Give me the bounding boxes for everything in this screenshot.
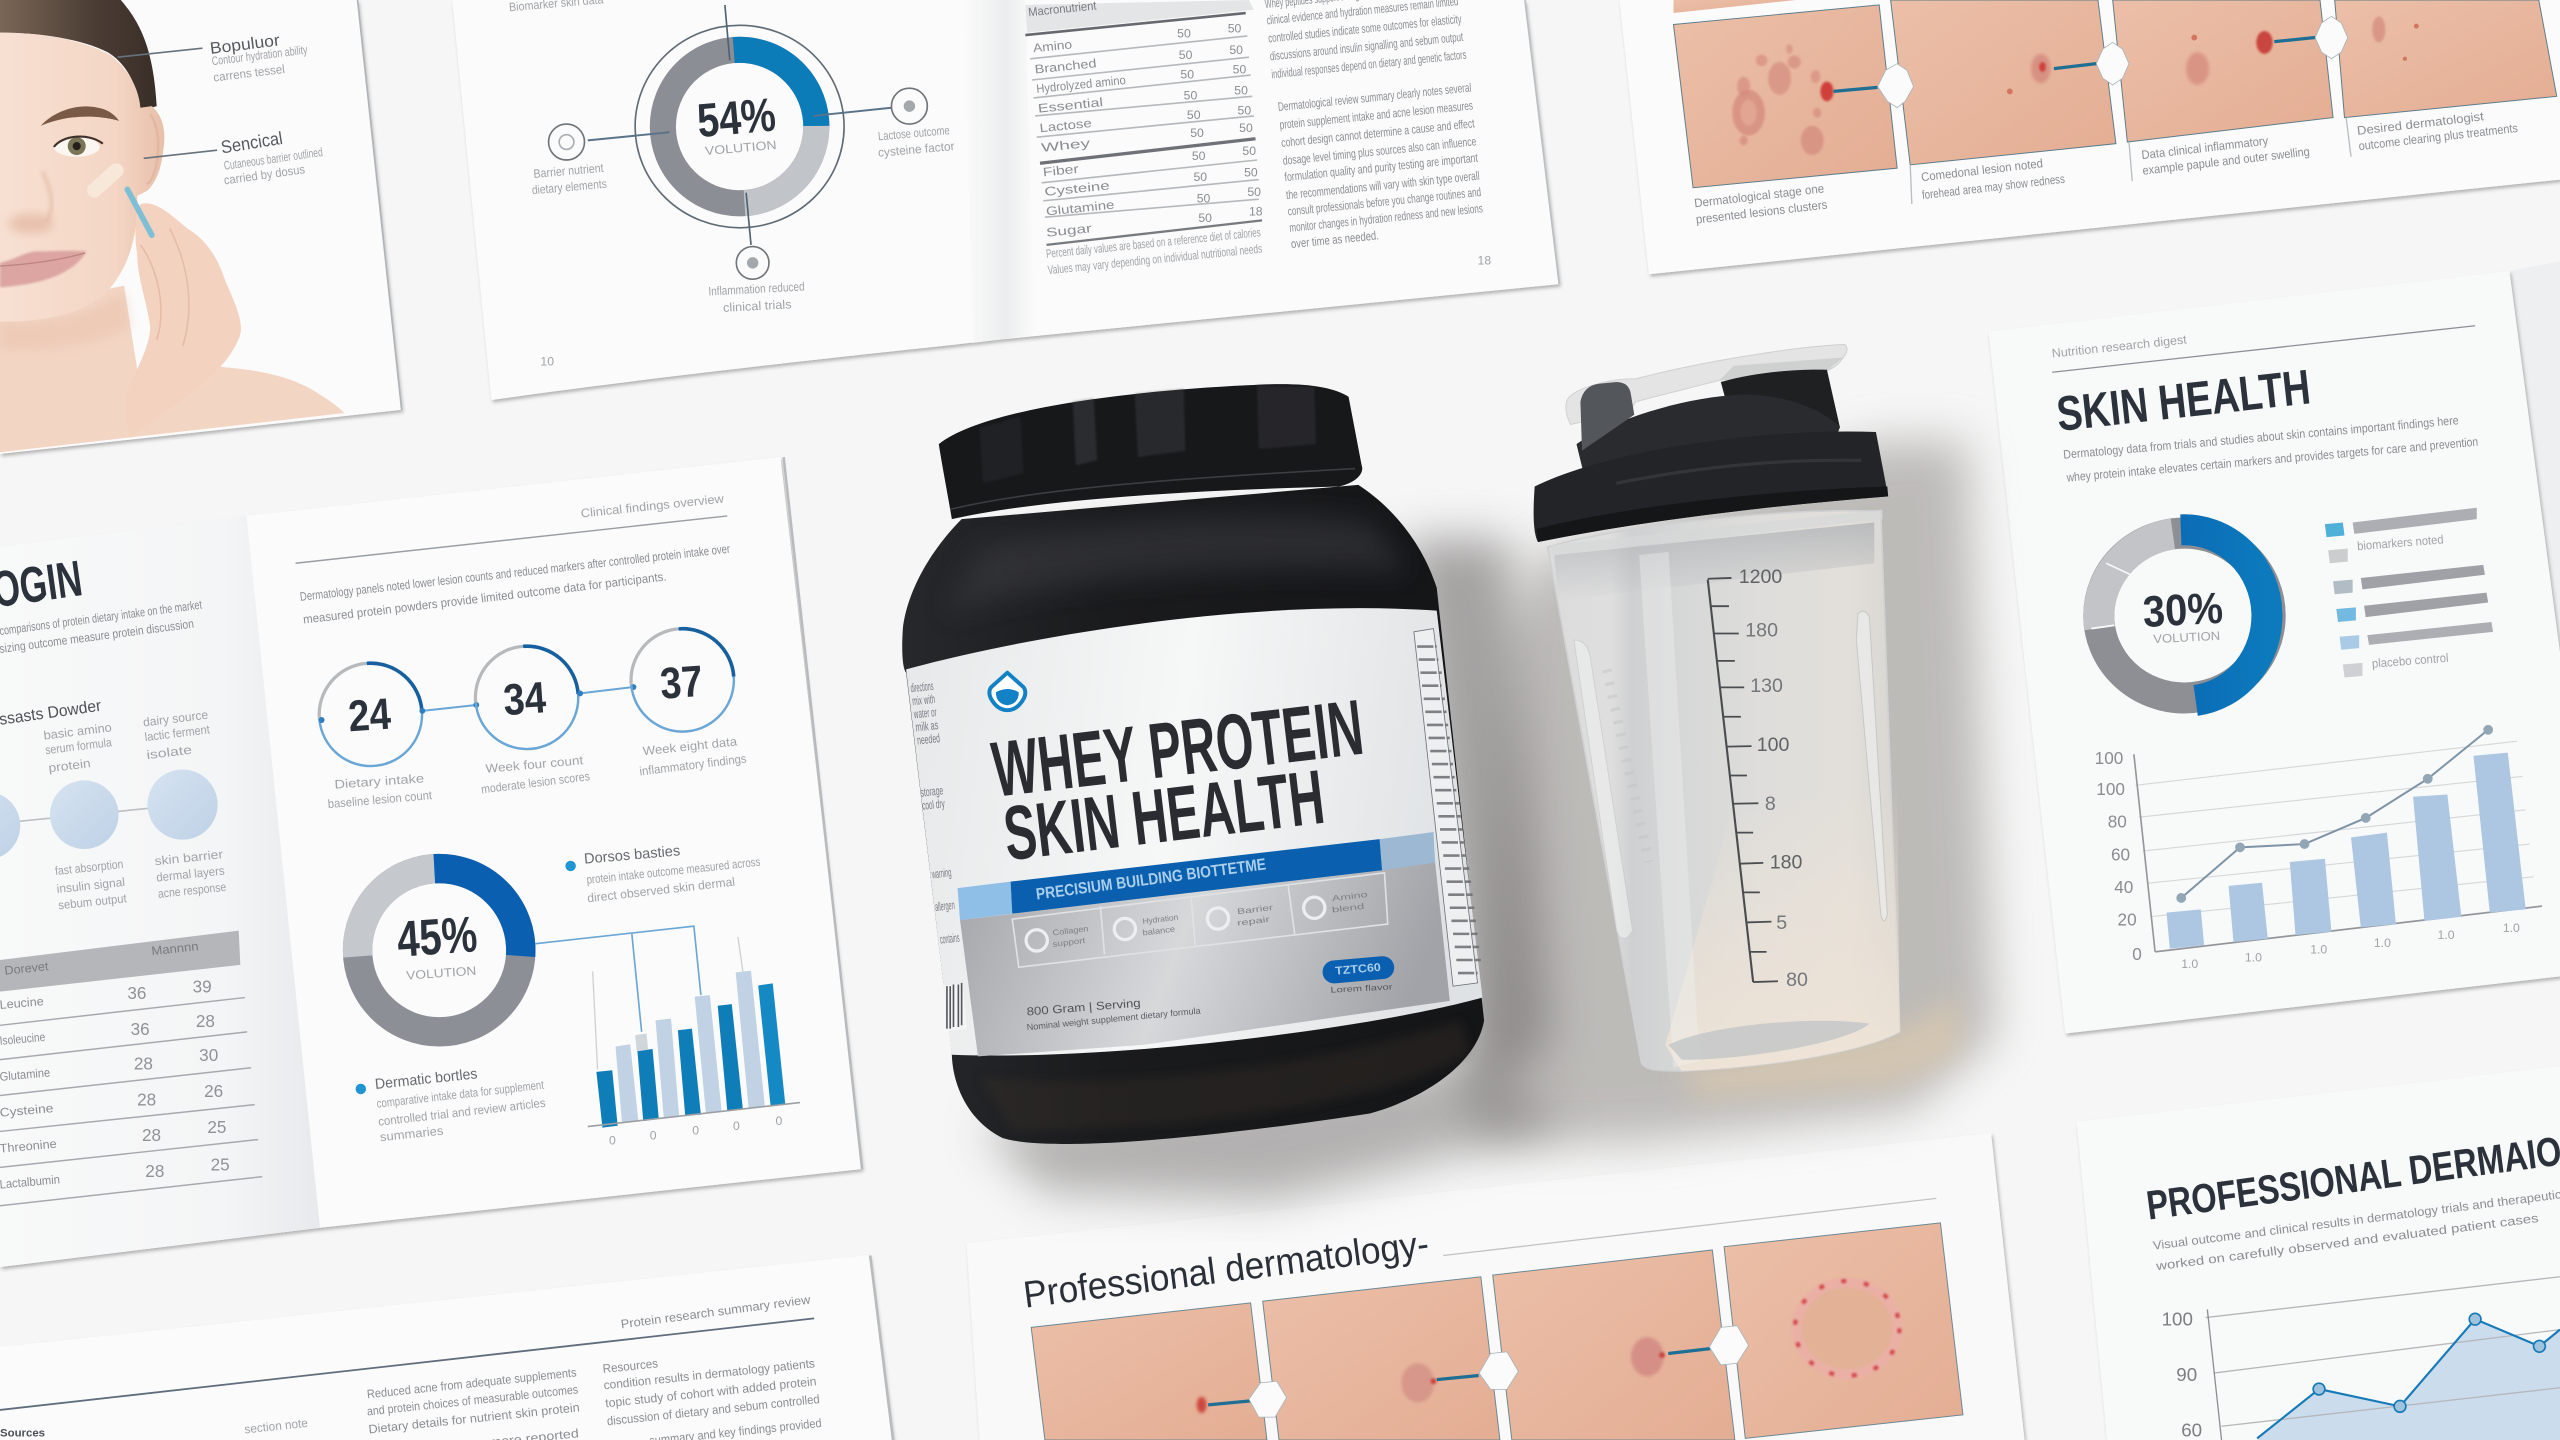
shaker: measurement scale: 180 xyxy=(1745,620,1778,642)
captions: Desired dermatologist xyxy=(2356,109,2485,138)
panel: bottom-right dermatology page xyxy=(2077,1066,2560,1440)
legend: bottom: controlled trial and review articles xyxy=(378,1096,546,1129)
label: side text left: directions xyxy=(910,679,934,695)
left page: table: 28 xyxy=(134,1053,153,1073)
chart: bars and trend line: 1.0 xyxy=(2245,951,2262,965)
label: feature icon grid xyxy=(1012,873,1388,967)
chart: paired bars: 0 xyxy=(650,1129,657,1143)
callout: Sencical: Sencical xyxy=(220,128,284,157)
label: side text left: storage xyxy=(920,783,944,800)
label: blue badge: Lorem flavor xyxy=(1330,982,1393,995)
shaker: cup xyxy=(1548,509,1900,1071)
right page: header: Dermatology panels noted lower lesion counts and reduced markers after controlled protein intake over xyxy=(299,542,731,604)
captions: Dermatological stage one xyxy=(1693,181,1825,210)
table: nutrition data: 50 xyxy=(1242,144,1256,158)
table: nutrition data: Sugar xyxy=(1045,221,1092,240)
table: nutrition data: 50 xyxy=(1229,43,1243,57)
table: nutrition data: Essential xyxy=(1037,95,1104,116)
left page: table: Cysteine xyxy=(0,1101,54,1120)
label: barcode xyxy=(943,983,967,1031)
chart: bars and trend line: 1.0 xyxy=(2503,921,2520,935)
label: blue ribbon xyxy=(1011,839,1382,914)
text block: lower columns: and protein choices of measurable outcomes xyxy=(366,1382,579,1418)
table: nutrition data: Fiber xyxy=(1042,162,1079,179)
chart: 30% donut: 30% xyxy=(2142,584,2224,637)
chart: bars and trend line xyxy=(2095,725,2542,971)
text block: lower columns: section note xyxy=(244,1416,309,1436)
table: nutrition data: Branched xyxy=(1034,56,1097,76)
panel: top-right dermatology strip xyxy=(1620,0,2560,274)
legend: bottom: summaries xyxy=(379,1124,444,1144)
metric circle: 37: 37 xyxy=(659,657,704,709)
table: nutrition data: Hydrolyzed amino xyxy=(1036,73,1127,96)
left page: table: 26 xyxy=(204,1081,223,1101)
chart: paired bars: 0 xyxy=(692,1124,699,1138)
label: feature icon grid: blend xyxy=(1331,902,1366,915)
shaker: measurement scale: 130 xyxy=(1750,675,1783,697)
chart: 54% donut: VOLUTION xyxy=(704,138,777,158)
table: nutrition data: 50 xyxy=(1197,191,1211,205)
legend: bottom: comparative intake data for supplement xyxy=(376,1078,545,1111)
chart: paired bars: 0 xyxy=(609,1133,616,1147)
label: side text left: mix with xyxy=(912,692,936,708)
text block: article columns: cohort design cannot determine a cause and effect xyxy=(1281,116,1476,150)
heading: Professional dermatology: Professional dermatology- xyxy=(1021,1222,1431,1316)
icon: right node xyxy=(813,88,955,160)
left page: table: Dorevet xyxy=(4,959,50,978)
text block: article columns: controlled studies indicate some outcomes for elasticity xyxy=(1267,12,1463,45)
legend: bottom: Dermatic bortles xyxy=(374,1066,478,1093)
metric circle: 24: baseline lesion count xyxy=(327,788,433,811)
text block: article columns: Dermatological review summary clearly notes several xyxy=(1277,80,1472,114)
chart: area line: 100 xyxy=(2162,1309,2193,1330)
icon: right node: cysteine factor xyxy=(877,139,955,160)
table: nutrition data: Lactose xyxy=(1039,116,1093,135)
captions: presented lesions clusters xyxy=(1695,198,1828,227)
table: nutrition data: 50 xyxy=(1198,211,1212,225)
icon: left node: dietary elements xyxy=(531,177,607,197)
shaker: measurement scale: 80 xyxy=(1786,969,1808,991)
text block: article columns: individual responses depend on dietary and genetic factors xyxy=(1271,48,1467,81)
label: side text left: water or xyxy=(913,705,937,721)
table: nutrition data: 50 xyxy=(1239,121,1253,135)
table: nutrition data: 50 xyxy=(1180,67,1194,81)
left page: table: 39 xyxy=(193,977,212,997)
metric circle: 24 xyxy=(315,659,433,811)
chart: bars and trend line: 0 xyxy=(2132,944,2142,964)
chart: 30% donut: VOLUTION xyxy=(2153,629,2220,646)
left page: flow circles: fast absorption xyxy=(54,857,124,878)
legend: top: Dorsos basties xyxy=(583,843,681,868)
chart: paired bars: 0 xyxy=(776,1114,783,1128)
left page: table: Lactalbumin xyxy=(0,1172,61,1192)
label: light blue ribbon right xyxy=(1380,832,1435,870)
captions: example papule and outer swelling xyxy=(2142,144,2311,178)
left page: table: 28 xyxy=(145,1161,164,1181)
metric circle: 37 xyxy=(627,624,747,778)
text block: article columns: 18 xyxy=(1478,253,1491,267)
callout: Sencical xyxy=(144,128,324,187)
right page: header xyxy=(296,492,731,627)
page number left: 10 xyxy=(540,355,554,369)
label: blue badge: TZTC60 xyxy=(1335,962,1381,978)
callout: Bopuluor xyxy=(118,31,309,85)
left page: flow circles: skin barrier xyxy=(154,847,224,868)
label: nutrition facts strip xyxy=(1414,629,1481,986)
text block: article columns: dosage level timing plus sources also can influence xyxy=(1282,134,1477,168)
panel: left booklet spread xyxy=(0,457,862,1267)
left page: table xyxy=(0,931,262,1206)
skin panel 3 xyxy=(1493,1250,1735,1440)
callout: Sencical: carried by dosus xyxy=(223,162,306,187)
label: side text left xyxy=(910,679,960,947)
left page: flow circles: protein xyxy=(48,756,92,775)
legend: bottom xyxy=(356,1066,546,1144)
icon: bottom node: Inflammation reduced xyxy=(708,279,805,299)
table: nutrition data: Percent daily values are based on a reference diet of calories xyxy=(1045,225,1261,261)
jar: body xyxy=(902,485,1484,1144)
legend: placebo control xyxy=(2371,651,2449,671)
icon: water drop logo xyxy=(989,673,1025,710)
shaker: spout xyxy=(1721,370,1840,428)
chart: area line: 90 xyxy=(2176,1364,2197,1385)
chart: paired bars xyxy=(536,926,800,1147)
table: nutrition data: 50 xyxy=(1247,185,1261,199)
chart: bars and trend line: 100 xyxy=(2095,748,2123,768)
label: feature icon grid: balance xyxy=(1142,925,1176,937)
table: nutrition data: 50 xyxy=(1193,170,1207,184)
text block: lower columns: condition results in dermatology patients xyxy=(603,1356,815,1392)
captions xyxy=(1693,109,2518,227)
left page: table: Threonine xyxy=(0,1137,57,1156)
captions: Data clinical inflammatory xyxy=(2141,134,2270,162)
left page: table: 28 xyxy=(196,1011,215,1031)
icon: right node: Lactose outcome xyxy=(877,123,950,143)
label: side text left: needed xyxy=(916,731,941,747)
label: silver panel xyxy=(960,862,1450,1056)
label: feature icon grid: Hydration xyxy=(1142,913,1179,926)
panel: top-left face page xyxy=(0,0,402,454)
table: nutrition data: 50 xyxy=(1184,89,1197,103)
left page: table: Isoleucine xyxy=(0,1030,46,1048)
text block: lower columns xyxy=(0,1356,822,1440)
connector 34 to 37 xyxy=(577,684,636,696)
skin panel 1 xyxy=(1031,1303,1267,1440)
callout: Bopuluor: carrens tessel xyxy=(213,62,286,85)
text block: intro xyxy=(2152,1187,2560,1273)
left page: flow circles: basic amino xyxy=(43,720,113,743)
icon: bottom node xyxy=(708,247,805,315)
chart: bars and trend line: 100 xyxy=(2096,779,2125,799)
label: net weight text: Nominal weight supplement dietary formula xyxy=(1026,1005,1201,1032)
product: shaker bottle xyxy=(1534,344,1900,1071)
left page: table: Mannnn xyxy=(151,939,199,958)
text block: lower columns: Dietary details for nutrient skin protein xyxy=(368,1400,581,1436)
chart: area line xyxy=(2162,1277,2560,1440)
skin panel 2 xyxy=(1263,1277,1500,1440)
text block: intro: worked on carefully observed and evaluated patient cases xyxy=(2154,1211,2539,1273)
text block: article columns: discussions around insulin signalling and sebum output xyxy=(1269,30,1464,63)
table: nutrition data: 50 xyxy=(1234,84,1248,98)
text block: lower columns: discussion of dietary and sebum controlled xyxy=(606,1392,821,1428)
metric circle: 34: moderate lesion scores xyxy=(480,769,591,796)
label: feature icon grid: Barrier xyxy=(1237,903,1274,916)
left page: flow circles: acne response xyxy=(157,880,227,901)
connector: markers and diamonds xyxy=(1208,1326,1749,1417)
panel: bottom-left page xyxy=(0,1255,893,1440)
skin panel 3 xyxy=(2113,0,2333,142)
legend: biomarkers noted xyxy=(2357,532,2444,553)
label: product title line 2: SKIN HEALTH xyxy=(999,755,1329,877)
icon: bottom node: clinical trials xyxy=(723,297,792,315)
chart: bars and trend line: 1.0 xyxy=(2310,942,2327,956)
shaker: measurement scale: 8 xyxy=(1765,793,1776,815)
left page: table: Leucine xyxy=(0,994,44,1012)
table: nutrition data: Glutamine xyxy=(1045,198,1115,218)
label: net weight text: 800 Gram | Serving xyxy=(1026,998,1141,1019)
label: side text left: milk as xyxy=(915,718,939,734)
metric circle: 37: Week eight data xyxy=(642,734,738,758)
panel: Skin Health page xyxy=(1989,261,2560,1033)
table: nutrition data: 50 xyxy=(1233,62,1246,76)
panel: bottom-middle dermatology page xyxy=(967,1133,2024,1440)
table: nutrition data: Cysteine xyxy=(1044,178,1110,199)
text block: article columns: formulation quality and purity testing are important xyxy=(1284,151,1479,184)
label: feature icon grid: repair xyxy=(1237,915,1271,928)
text block: article columns: the recommendations will vary with skin type overall xyxy=(1285,169,1480,202)
chart: paired bars: 0 xyxy=(733,1119,740,1133)
jar: cap xyxy=(939,384,1362,519)
left page: flow circles xyxy=(0,697,227,912)
left page: flow circles: lactic ferment xyxy=(144,722,211,744)
left page: flow circles: dermal layers xyxy=(156,864,225,885)
table: nutrition data: 50 xyxy=(1228,22,1242,36)
metric circle: 24: Dietary intake xyxy=(334,771,425,792)
photo: woman applying skincare xyxy=(0,0,344,452)
table: nutrition data: Whey xyxy=(1041,136,1092,155)
left page: table: 28 xyxy=(137,1089,156,1109)
table: nutrition data: 50 xyxy=(1179,48,1193,62)
text block: article columns: consult professionals before you change routines and xyxy=(1287,185,1482,218)
left page: intro text: sizing outcome measure protein discussion xyxy=(0,617,195,656)
text block: intro xyxy=(2063,413,2479,485)
text block: lower columns: topic study of cohort with added protein xyxy=(605,1374,817,1410)
skin panel 1 xyxy=(1673,5,1897,188)
chart: bars and trend line: 60 xyxy=(2111,844,2130,864)
table: nutrition data: 50 xyxy=(1190,126,1204,140)
legend xyxy=(2325,508,2493,678)
label: feature icon grid: Amino xyxy=(1331,890,1369,903)
chart: bars and trend line: 20 xyxy=(2118,910,2137,930)
skin panel 4 xyxy=(2335,0,2557,118)
icon: left node xyxy=(531,124,669,197)
label: product title line 1: WHEY PROTEIN xyxy=(988,683,1368,814)
chart: bars and trend line: 80 xyxy=(2108,812,2127,832)
label: side text left: allergen xyxy=(934,898,955,914)
callout: Sencical: Cutaneous barrier outlined xyxy=(223,145,324,173)
panel: Skin Health page: Nutrition research digest xyxy=(2051,332,2188,361)
captions: forehead area may show redness xyxy=(1921,172,2066,202)
left page: flow circles: serum formula xyxy=(44,735,113,757)
captions: outcome clearing plus treatments xyxy=(2358,121,2518,153)
shaker: flip cap xyxy=(1566,344,1847,424)
label: feature icon grid: support xyxy=(1052,936,1087,949)
jar: label xyxy=(906,608,1482,1056)
chart: 45% donut: 45% xyxy=(395,905,479,968)
legend: top xyxy=(565,843,761,905)
left page: table: 30 xyxy=(199,1045,218,1065)
right page: header: Clinical findings overview xyxy=(580,492,725,521)
table: nutrition data: 50 xyxy=(1192,149,1206,163)
table: nutrition data: Values may vary depending on individual nutritional needs xyxy=(1047,242,1263,277)
chart: 54% donut xyxy=(635,5,844,245)
left page: table: 28 xyxy=(142,1125,161,1145)
chart: 45% donut: VOLUTION xyxy=(406,964,477,983)
metric circle: 34: Week four count xyxy=(485,753,584,776)
table: nutrition data: 50 xyxy=(1238,103,1251,117)
metric circle: 37: inflammatory findings xyxy=(639,751,747,778)
left page: flow circles: ssasts Dowder xyxy=(0,697,103,729)
skin panel 2 xyxy=(1891,0,2116,165)
text block: intro: Dermatology data from trials and studies about skin contains important findings here xyxy=(2063,413,2459,462)
chart: bars and trend line: 1.0 xyxy=(2438,928,2455,942)
panel: bottom-left page: Protein research summary review xyxy=(620,1292,811,1331)
left page: table: 25 xyxy=(211,1155,230,1175)
label: light blue ribbon left xyxy=(958,882,1012,920)
text block: article columns: protein supplement intake and acne lesion measures xyxy=(1279,98,1474,132)
left page: table: 36 xyxy=(127,983,146,1003)
chart: 54% donut: 54% xyxy=(695,88,778,148)
captions: Comedonal lesion noted xyxy=(1920,156,2044,184)
left page: table: 36 xyxy=(131,1019,150,1039)
metric circle: 24: 24 xyxy=(347,690,393,741)
table: nutrition data: Amino xyxy=(1032,37,1073,55)
left page: flow circles: isolate xyxy=(146,743,193,762)
shaker: measurement scale xyxy=(1708,566,1808,991)
text block: lower columns: Reduced acne from adequate supplements xyxy=(366,1365,577,1401)
left page: flow circles: dairy source xyxy=(142,708,209,730)
jar: bottom reflection xyxy=(980,1020,1469,1130)
left page: flow circles: sebum output xyxy=(58,891,128,912)
heading: SKIN HEALTH: SKIN HEALTH xyxy=(2054,360,2313,442)
table: nutrition data xyxy=(1025,0,1263,277)
left page: table: Glutamine xyxy=(0,1065,51,1084)
jar: label: contains xyxy=(939,931,960,947)
chart: bars and trend line: 1.0 xyxy=(2374,936,2391,950)
left page: table: 25 xyxy=(207,1117,226,1137)
connector 24 to 34 xyxy=(419,702,479,714)
skin panel 4 xyxy=(1724,1223,1963,1438)
legend: top: direct observed skin dermal xyxy=(587,875,736,905)
shaker: measurement scale: 100 xyxy=(1757,734,1790,756)
right page: header: measured protein powders provide limited outcome data for participants. xyxy=(302,569,667,627)
text block: article columns: over time as needed. xyxy=(1290,228,1379,251)
shaker: measurement scale: 5 xyxy=(1776,912,1787,934)
shaker: measurement scale: 1200 xyxy=(1739,566,1782,588)
text block: lower columns: Resources xyxy=(602,1356,659,1376)
text block: intro: Visual outcome and clinical results in dermatology trials and therapeutic xyxy=(2152,1187,2560,1253)
label: blue badge xyxy=(1322,955,1395,995)
callout: Bopuluor: Contour hydration ability xyxy=(211,43,309,68)
table: nutrition data: 50 xyxy=(1244,165,1258,179)
shaker: measurement scale: 180 xyxy=(1770,852,1803,874)
shadow: products cast shadow xyxy=(980,441,1995,1200)
shaker: lid xyxy=(1534,382,1888,542)
chart: bars and trend line: 40 xyxy=(2114,877,2133,897)
metric circle: 34: 34 xyxy=(502,673,548,725)
icon: left node: Barrier nutrient xyxy=(533,161,605,181)
jar: shoulder sheen xyxy=(947,515,1407,612)
left page: intro text: comparisons of protein dietary intake on the market xyxy=(0,598,203,638)
label: side text left: cool dry xyxy=(921,796,946,813)
label: feature icon grid: Collagen xyxy=(1052,924,1089,937)
label: ribbon text: PRECISIUM BUILDING BIOTTETME xyxy=(1035,855,1267,904)
text block: article columns xyxy=(1264,0,1491,267)
text block: article columns: monitor changes in hydration redness and new lesions xyxy=(1289,201,1483,235)
table: nutrition data: 50 xyxy=(1177,27,1191,41)
chart: bars and trend line: 1.0 xyxy=(2181,957,2198,971)
metric circle: 34 xyxy=(471,642,591,796)
text block: intro: whey protein intake elevates certain markers and provides targets for care and prevention xyxy=(2065,435,2479,485)
chart: 30% donut xyxy=(2088,522,2281,709)
label: side text left: warning xyxy=(931,865,952,881)
table: nutrition data: 50 xyxy=(1187,108,1201,122)
left page: intro text xyxy=(0,598,203,656)
panel: top-middle donut spread xyxy=(452,0,1559,400)
left page: flow circles: insulin signal xyxy=(56,875,126,896)
connector: markers and diamonds xyxy=(1833,16,2351,204)
table: nutrition data: 18 xyxy=(1249,205,1263,219)
legend: top: protein intake outcome measured across xyxy=(586,855,761,887)
callout: Bopuluor: Bopuluor xyxy=(209,31,281,58)
chart: 45% donut xyxy=(352,863,526,1037)
text block: lower columns: Sources xyxy=(0,1428,45,1440)
product: whey protein jar xyxy=(902,384,1484,1144)
